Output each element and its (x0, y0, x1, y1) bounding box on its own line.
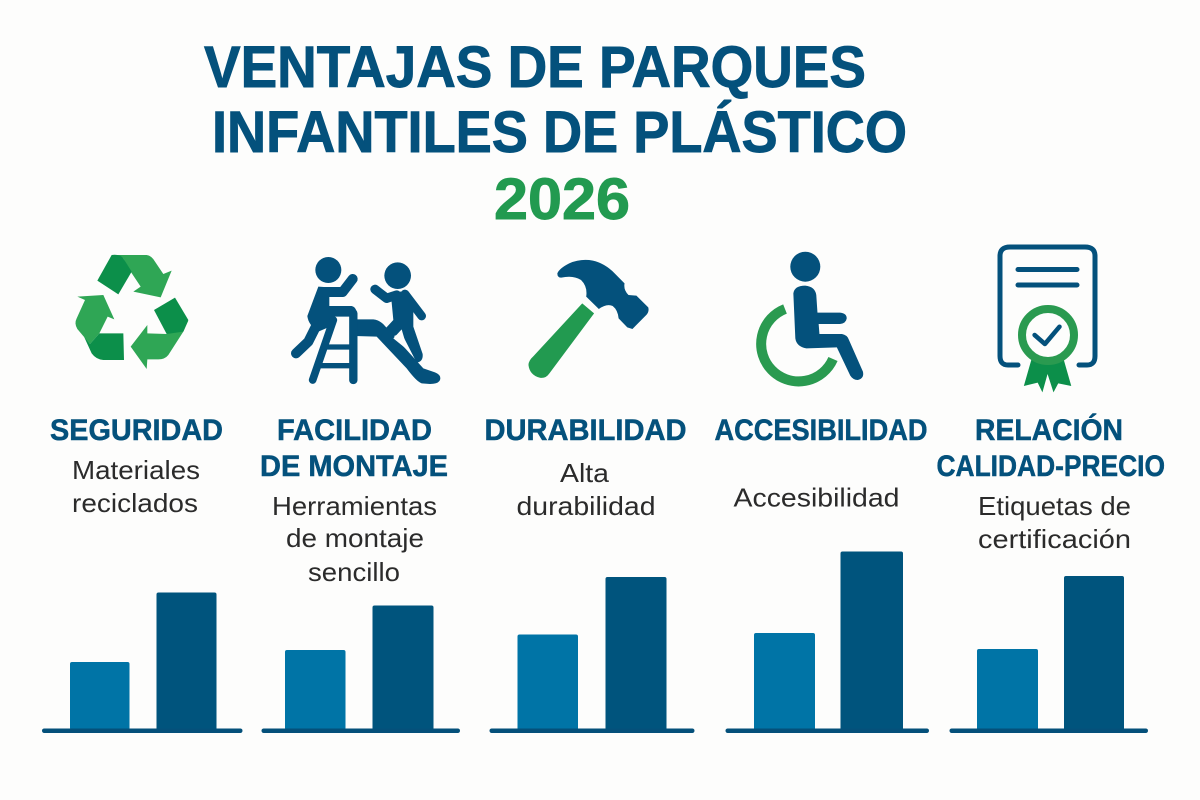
text: etiquetas de certificacion (978, 491, 1131, 554)
panel: relacion calidad-precio (936, 247, 1165, 733)
title: 2026 (494, 167, 630, 232)
icon: certificate with seal (1000, 247, 1095, 392)
title: VENTAJAS DE PARQUES (204, 35, 866, 100)
title (204, 35, 907, 232)
bar chart: facilidad de montaje (262, 606, 460, 733)
heading: facilidad de montaje: FACILIDAD (277, 414, 432, 447)
heading: seguridad: SEGURIDAD (50, 414, 223, 447)
heading: durabilidad: DURABILIDAD (484, 414, 686, 447)
heading: relacion calidad-precio (936, 413, 1165, 483)
text: alta durabilidad: durabilidad (516, 491, 656, 521)
heading: facilidad de montaje: DE MONTAJE (260, 450, 448, 483)
heading: relacion calidad-precio: RELACIÓN (975, 413, 1123, 447)
text: materiales reciclados: Materiales (72, 455, 200, 485)
text: etiquetas de certificacion: certificación (978, 524, 1131, 554)
text: materiales reciclados: reciclados (72, 488, 198, 518)
text: alta durabilidad (516, 458, 656, 521)
panel: facilidad de montaje (260, 257, 460, 733)
heading: facilidad de montaje (260, 414, 448, 483)
heading: accesibilidad: ACCESIBILIDAD (714, 414, 928, 447)
icon: recycling arrows (75, 255, 188, 369)
bar chart: durabilidad (490, 577, 694, 733)
bar chart: seguridad (42, 592, 242, 733)
text: herramientas de montaje sencillo: de montaje (286, 523, 424, 553)
text: herramientas de montaje sencillo: Herramientas (272, 491, 437, 521)
bar chart: relacion calidad-precio (950, 576, 1148, 733)
text: herramientas de montaje sencillo: sencillo (308, 557, 400, 587)
icon: wheelchair user (761, 252, 863, 381)
panel: accesibilidad (714, 252, 929, 733)
heading: relacion calidad-precio: CALIDAD-PRECIO (936, 450, 1165, 483)
icon: children on a slide (296, 257, 440, 384)
title: INFANTILES DE PLÁSTICO (212, 100, 907, 165)
text: accesibilidad: Accesibilidad (734, 482, 900, 512)
text: alta durabilidad: Alta (560, 458, 610, 488)
icon: hammer (528, 260, 649, 378)
bar chart: accesibilidad (726, 552, 929, 733)
panel: durabilidad (484, 260, 694, 733)
text: etiquetas de certificacion: Etiquetas de (978, 491, 1131, 521)
panel: seguridad (42, 255, 242, 733)
text: materiales reciclados (72, 455, 200, 518)
text: herramientas de montaje sencillo (272, 491, 437, 587)
